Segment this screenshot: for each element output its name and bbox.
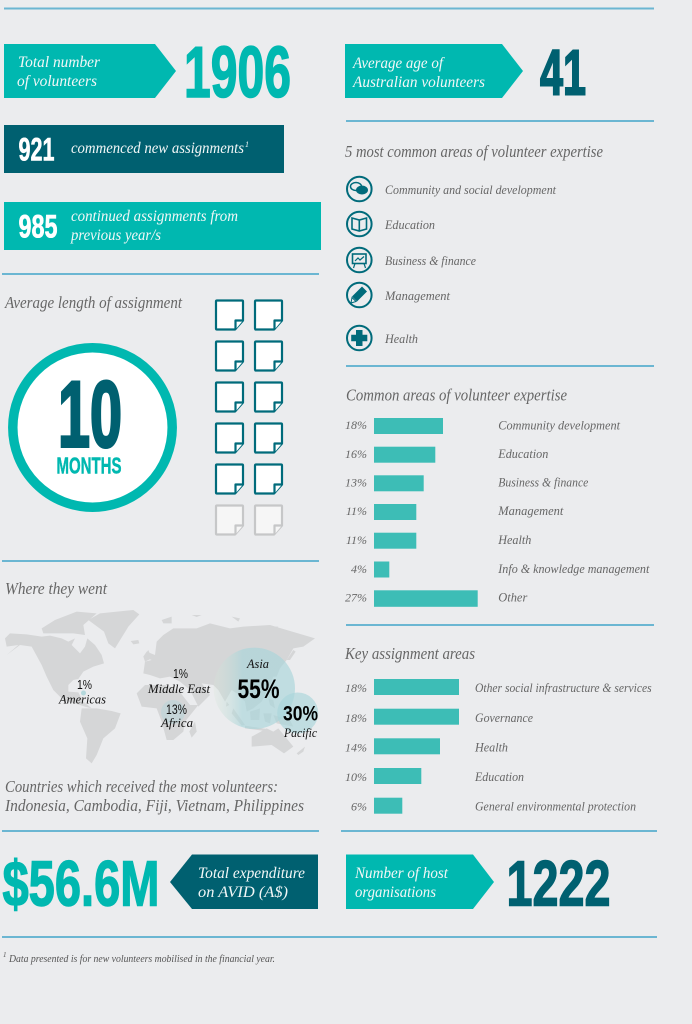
bar: education 16%: 16% <box>345 447 367 461</box>
heading: average length of assignment: Average length of assignment <box>4 293 182 312</box>
arrow label <box>170 854 318 909</box>
list item: education: Education <box>384 217 435 232</box>
map label: Middle East: Middle East <box>147 681 210 696</box>
number: 1222: 1222 <box>506 848 610 920</box>
callout: 10 months circle: 10 <box>58 362 122 466</box>
bar: community development 18%: Community development <box>498 418 620 432</box>
list item: business: Business & finance <box>385 253 476 268</box>
bar: info and knowledge management 4%: Info & knowledge management <box>497 561 650 576</box>
panel: total expenditure <box>2 848 318 920</box>
arrow label: on AVID (A$) <box>198 884 288 901</box>
map label: Pacific: Pacific <box>283 725 317 740</box>
bar: education 10%: 10% <box>345 770 367 784</box>
map label: Africa: 13% <box>166 701 187 717</box>
bar: general environmental protection 6%: General environmental protection <box>475 798 636 814</box>
bar: general environmental protection 6%: 6% <box>351 800 367 814</box>
bar: community development 18% <box>345 418 620 434</box>
bar: health 14%: 14% <box>345 740 367 754</box>
panel: host organisations <box>346 848 610 920</box>
map label: Middle East: 1% <box>173 666 188 681</box>
panel: continued assignments: continued assignments from <box>71 208 238 225</box>
footnote: 1 <box>3 951 6 959</box>
world map <box>5 610 315 763</box>
bar: business and finance 13% <box>345 474 588 491</box>
bar: governance 18%: Governance <box>475 710 533 725</box>
bar: general environmental protection 6% <box>351 798 636 814</box>
bar: other 27% <box>345 590 528 607</box>
bar: health 14% <box>345 738 508 754</box>
icon: medical cross <box>347 326 372 350</box>
panel: commenced new assignments: commenced new assignments <box>71 140 244 157</box>
bar: business and finance 13%: Business & finance <box>498 474 588 490</box>
bar: governance 18% <box>345 709 533 725</box>
arrow label: Australian volunteers <box>352 74 485 91</box>
bar: other social infrastructure 18% <box>345 679 652 695</box>
map label: Americas: Americas <box>58 692 106 706</box>
list item: health: Health <box>384 331 418 346</box>
bubble: Pacific <box>277 692 318 734</box>
bar: community development 18%: 18% <box>345 418 367 432</box>
bar: info and knowledge management 4% <box>351 561 650 578</box>
bar: info and knowledge management 4%: 4% <box>351 562 367 576</box>
arrow label: Total number <box>18 54 101 71</box>
list item: health <box>347 326 418 350</box>
bar: business and finance 13%: 13% <box>345 476 367 490</box>
bar: management 11% <box>346 503 564 520</box>
panel: commenced new assignments: 921 <box>18 132 54 168</box>
panel: continued assignments: previous year/s <box>70 227 161 244</box>
heading: where they went: Where they went <box>5 579 107 598</box>
panel: continued assignments: 985 <box>18 208 58 244</box>
map label: Americas: 1% <box>77 677 92 692</box>
bar: other social infrastructure 18%: 18% <box>345 681 367 695</box>
map label: Asia: 55% <box>238 674 280 704</box>
list item: management <box>347 283 450 307</box>
bar: other 27%: Other <box>498 590 528 604</box>
map label: Africa <box>160 701 193 730</box>
icon: pencil <box>347 283 372 307</box>
bar: education 16% <box>345 446 548 463</box>
bubble: Asia <box>214 648 295 729</box>
text block: countries <box>4 777 304 815</box>
number: 1906: 1906 <box>184 33 291 113</box>
list item: management: Management <box>384 288 450 303</box>
bar: health 11%: Health <box>497 532 531 547</box>
bar: other 27%: 27% <box>345 590 367 604</box>
bar: education 16%: Education <box>497 446 548 461</box>
map label: Asia: Asia <box>246 656 269 671</box>
number: expenditure: $56.6M <box>2 848 160 920</box>
list item: business <box>347 248 476 272</box>
map label: Pacific <box>283 702 318 740</box>
bar: other social infrastructure 18%: Other social infrastructure & services <box>475 680 652 695</box>
arrow label: organisations <box>355 884 436 901</box>
bar: management 11%: 11% <box>346 504 367 518</box>
icon: chart easel <box>347 248 372 272</box>
map label: Pacific: 30% <box>283 702 318 726</box>
arrow label: Total expenditure <box>198 865 305 882</box>
icon: open book <box>347 212 372 236</box>
arrow label <box>4 44 176 98</box>
map label: Asia <box>238 656 280 704</box>
heading: common areas of volunteer expertise: Common areas of volunteer expertise <box>346 386 567 404</box>
map label: Middle East <box>147 666 210 696</box>
list item: community <box>347 177 556 201</box>
bar chart: common areas <box>345 418 650 607</box>
arrow label: Number of host <box>354 865 449 882</box>
panel: continued assignments <box>4 202 321 250</box>
heading: key assignment areas: Key assignment areas <box>344 644 475 663</box>
panel: commenced new assignments <box>4 125 284 173</box>
panel: total number of volunteers <box>4 33 291 113</box>
heading: 5 most common areas: 5 most common areas of volunteer expertise <box>345 142 603 161</box>
callout: 10 months circle <box>13 348 172 507</box>
map label: Africa: Africa <box>160 715 193 730</box>
panel: average age <box>345 36 586 108</box>
bar: health 11%: 11% <box>346 533 367 547</box>
arrow label: of volunteers <box>17 73 97 90</box>
icon: speech bubbles <box>347 177 372 201</box>
bubble: Americas marker <box>81 690 86 696</box>
list item: education <box>347 212 435 236</box>
bar: governance 18%: 18% <box>345 711 367 725</box>
arrow label <box>345 44 523 98</box>
icon grid: months as note pages <box>216 300 282 534</box>
footnote: Data presented is for new volunteers mobilised in the financial year. <box>8 954 275 965</box>
number: 41: 41 <box>540 36 586 108</box>
bar: health 14%: Health <box>474 740 508 754</box>
panel: commenced new assignments: 1 <box>245 140 249 149</box>
bar: management 11%: Management <box>497 503 564 518</box>
bubble: Africa <box>161 700 185 724</box>
arrow label: Average age of <box>352 55 446 72</box>
list item: community: Community and social development <box>385 182 556 197</box>
text block: countries: Indonesia, Cambodia, Fiji, Vietnam, Philippines <box>4 796 304 815</box>
bar: education 10%: Education <box>474 769 524 784</box>
text block: countries: Countries which received the most volunteers: <box>5 777 278 796</box>
callout: 10 months circle: MONTHS <box>56 452 122 478</box>
bar chart: key assignment areas <box>345 679 652 814</box>
bar: health 11% <box>346 532 531 549</box>
bar: education 10% <box>345 768 524 784</box>
arrow label <box>346 854 494 909</box>
map label: Americas <box>58 677 106 706</box>
